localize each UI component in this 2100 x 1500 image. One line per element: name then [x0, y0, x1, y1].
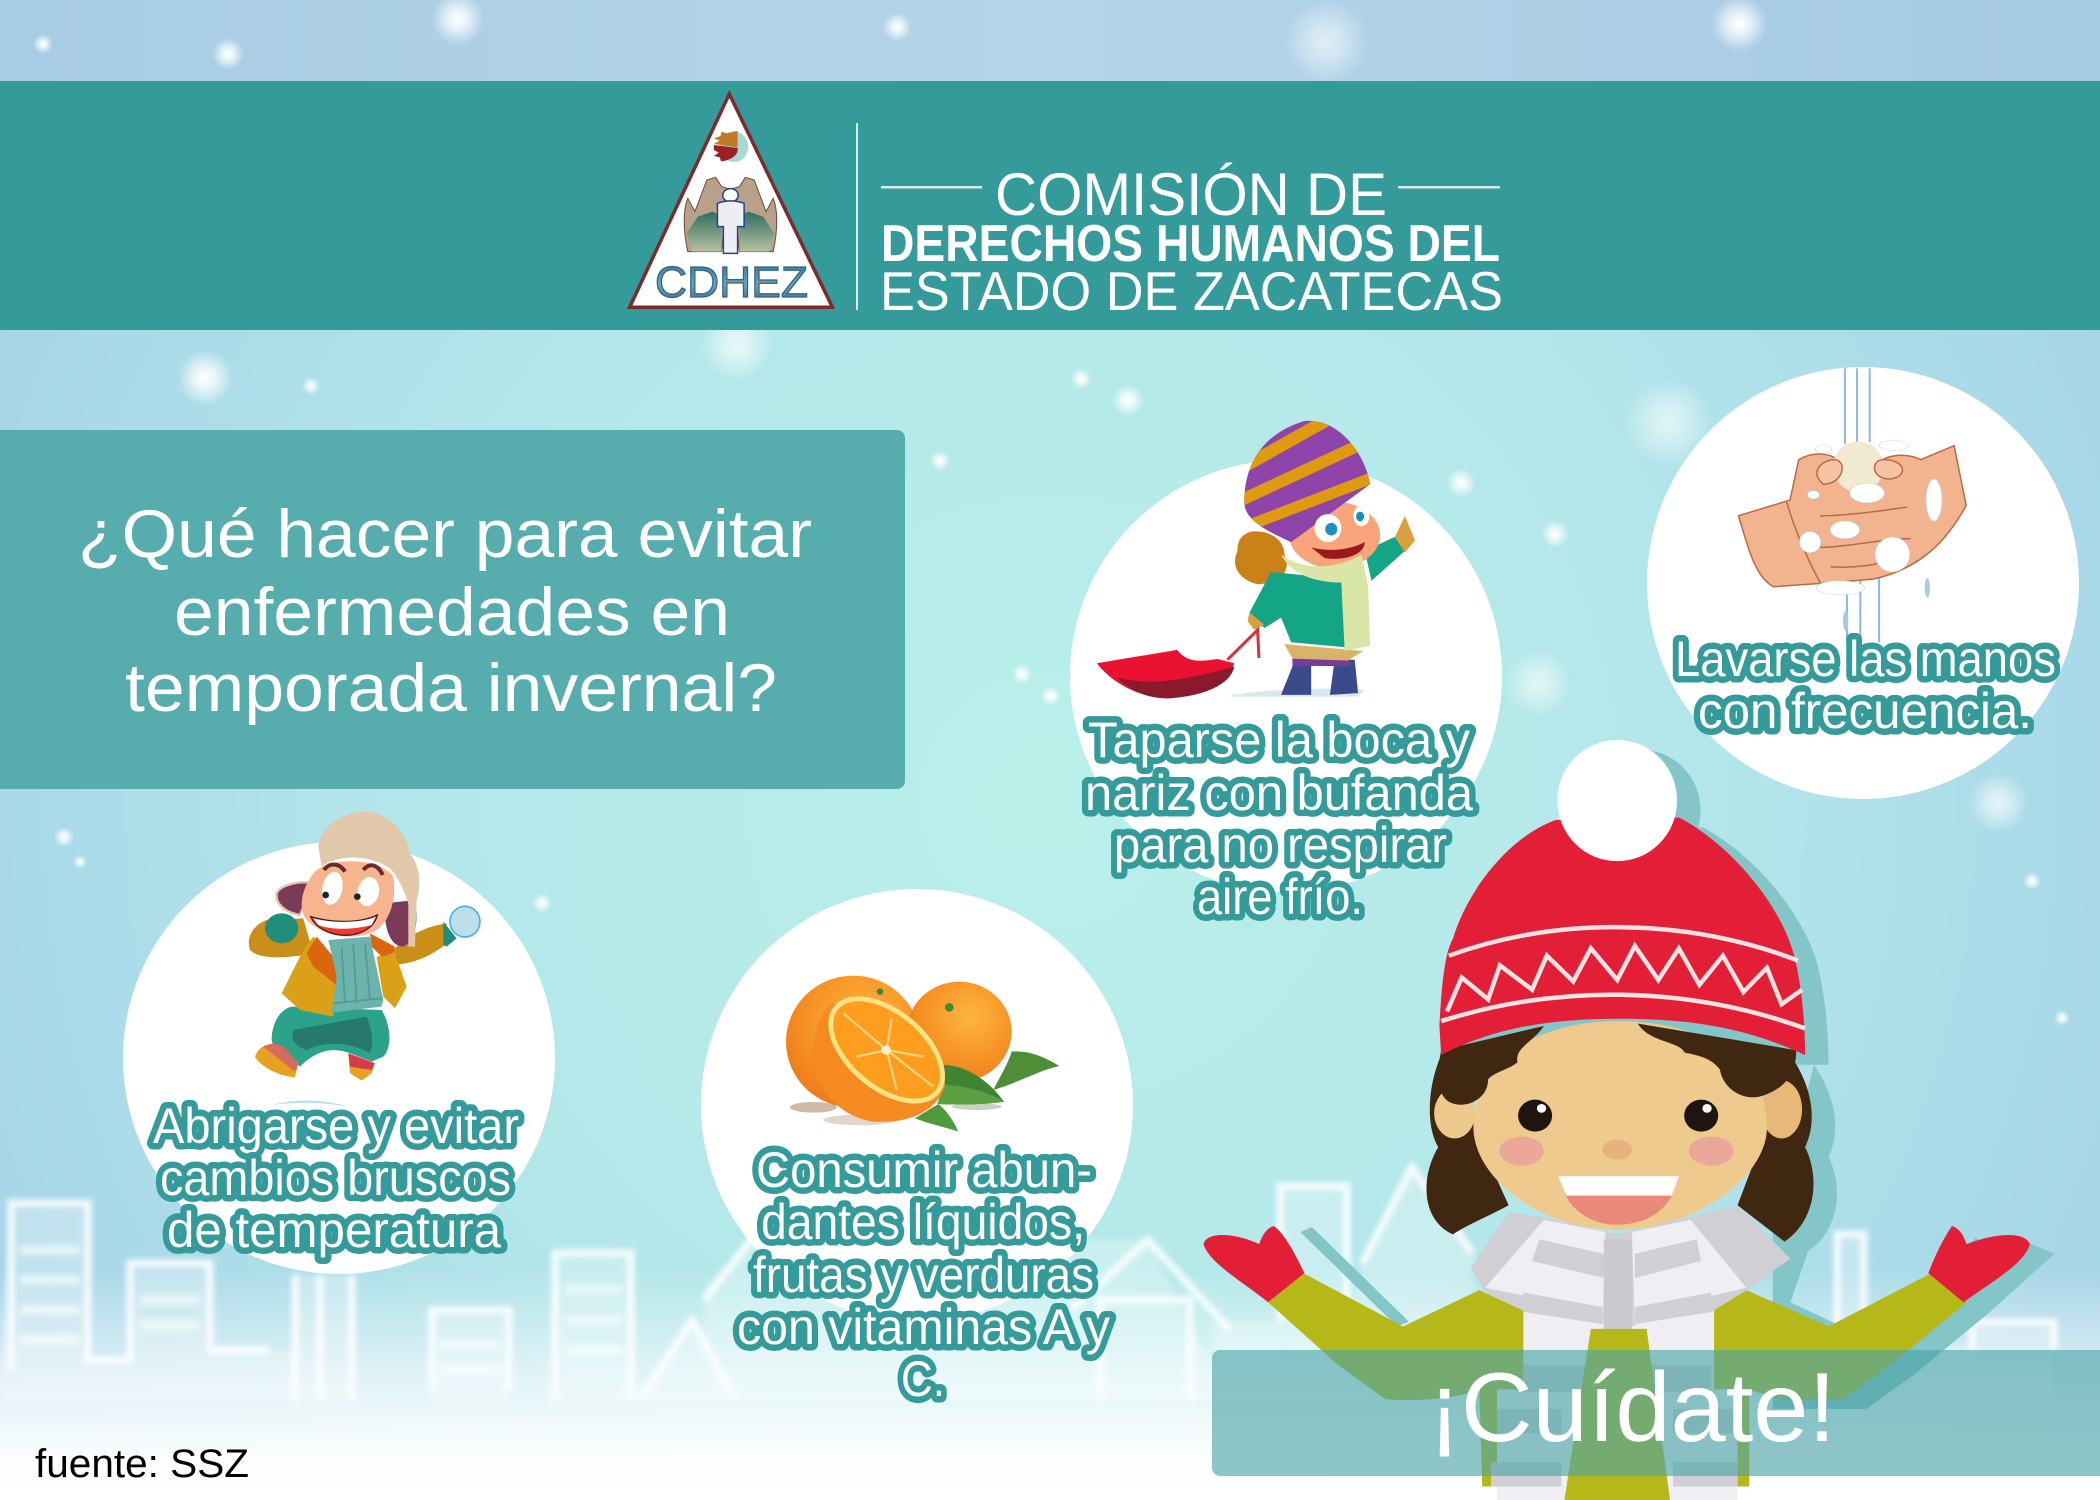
icon: oranges: [786, 975, 1059, 1132]
caption: consumir: [737, 1142, 1110, 1407]
caption: consumir: frutas y verduras: [753, 1247, 1094, 1303]
title: temporada invernal?: [125, 650, 777, 726]
organisation name: COMISIÓN DE: [995, 161, 1387, 228]
source note: fuente: SSZ: [35, 1442, 249, 1486]
banner: cuídate: [1212, 1350, 2100, 1476]
caption: abrigarse: Abrigarse y evitar: [153, 1098, 519, 1154]
icon: child with sled: [1097, 418, 1415, 698]
icon: washing hands: [1738, 368, 1966, 642]
caption: lavarse: Lavarse las manos: [1675, 631, 2056, 687]
caption: consumir: Consumir abun-: [756, 1142, 1092, 1198]
caption: abrigarse: cambios bruscos: [160, 1150, 511, 1206]
caption: taparse: para no respirar: [1114, 817, 1447, 873]
caption: consumir: C.: [901, 1351, 945, 1407]
illustration: girl in winter clothes: [1203, 740, 2054, 1500]
icon: boy with snowball: [249, 812, 480, 1107]
organisation name: DERECHOS HUMANOS DEL: [881, 215, 1500, 273]
logo wordmark: CDHEZ: [655, 258, 808, 307]
caption: taparse: nariz con bufanda: [1085, 765, 1473, 821]
panel: abrigarse: [123, 812, 555, 1274]
organisation name: ESTADO DE ZACATECAS: [880, 260, 1503, 322]
panel: consumir: [701, 889, 1133, 1407]
header band: [0, 81, 2100, 330]
panel: title: [0, 430, 905, 789]
caption: lavarse: con frecuencia.: [1698, 683, 2032, 739]
logo: CDHEZ triangle: [630, 94, 832, 307]
caption: abrigarse: [153, 1098, 519, 1258]
panel: lavarse: [1647, 367, 2079, 799]
panel: taparse: [1070, 418, 1502, 925]
divider: [856, 123, 858, 310]
city skyline: [0, 1167, 2054, 1400]
caption: lavarse: [1675, 631, 2056, 739]
banner: cuídate: ¡Cuídate!: [1428, 1352, 1836, 1462]
title: ¿Qué hacer para evitar: [78, 496, 812, 572]
caption: taparse: [1085, 712, 1473, 925]
organisation name: [880, 161, 1503, 322]
caption: taparse: Taparse la boca y: [1088, 712, 1470, 768]
title: enfermedades en: [174, 574, 730, 650]
title: [78, 496, 812, 726]
caption: consumir: dantes líquidos,: [761, 1194, 1085, 1250]
caption: consumir: con vitaminas A y: [737, 1299, 1110, 1355]
caption: taparse: aire frío.: [1197, 869, 1363, 925]
caption: abrigarse: de temperatura: [167, 1202, 501, 1258]
snow particles: [33, 0, 2070, 1026]
girl drop shadow: [1300, 750, 2054, 1409]
snow bank: [0, 1270, 2100, 1500]
